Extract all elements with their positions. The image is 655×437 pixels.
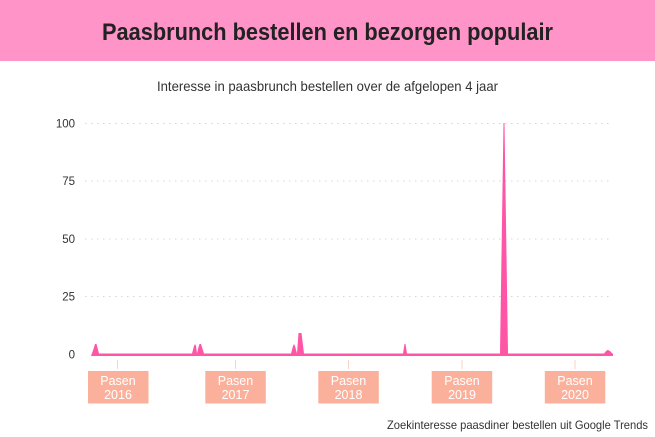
title banner: Paasbrunch bestellen en bezorgen populair (102, 19, 553, 46)
label: Pasen 2018 (318, 371, 379, 404)
label: Pasen 2017 (205, 371, 266, 404)
label: Pasen 2016: Pasen (100, 374, 136, 388)
label: Pasen 2018: 2018 (335, 388, 362, 402)
label: Pasen 2019: 2019 (448, 388, 476, 402)
label: Pasen 2019: Pasen (444, 374, 480, 388)
label: Pasen 2017: Pasen (218, 374, 253, 388)
label: Pasen 2016 (88, 371, 148, 404)
label: Pasen 2020: Pasen (557, 374, 593, 388)
label: Pasen 2019 (432, 371, 492, 404)
label: Pasen 2020: 2020 (561, 388, 589, 402)
title banner (0, 0, 655, 61)
area series: search interest (91, 123, 613, 356)
label: Pasen 2016: 2016 (104, 388, 132, 402)
Easter tick marks (118, 360, 575, 369)
y-axis labels: 25 (62, 292, 75, 304)
y-axis labels: 50 (62, 234, 75, 246)
chart subtitle: Interesse in paasbrunch bestellen over de afgelopen 4 jaar (157, 78, 498, 94)
label: Pasen 2018: Pasen (331, 374, 366, 388)
y-axis labels: 0 (69, 350, 75, 362)
label: Pasen 2020 (545, 371, 605, 404)
y-axis labels: 100 (56, 118, 75, 130)
y-axis labels: 75 (62, 176, 75, 188)
label: Pasen 2017: 2017 (222, 388, 249, 402)
y-axis labels (56, 118, 75, 362)
